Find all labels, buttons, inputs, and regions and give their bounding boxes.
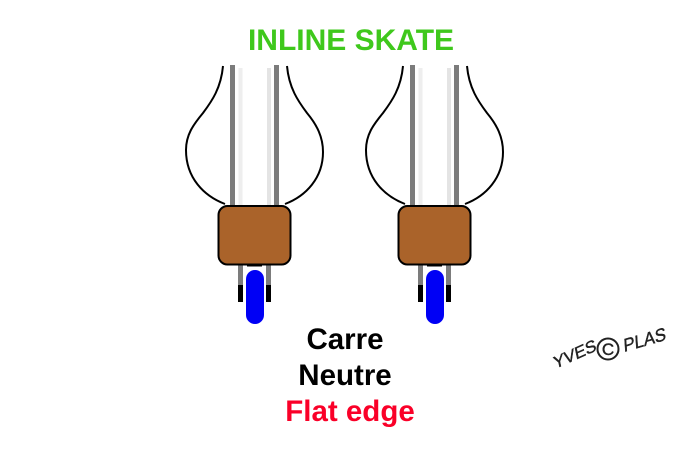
icon: left skate bbox=[186, 65, 323, 324]
label: Flat edge: Flat edge bbox=[285, 395, 415, 428]
label: Neutre: Neutre bbox=[298, 359, 392, 392]
signature: PLAS: PLAS bbox=[623, 324, 667, 356]
icon: right skate bbox=[366, 65, 503, 324]
signature: YVES: YVES bbox=[552, 335, 598, 373]
right skate brown block bbox=[398, 206, 470, 264]
left skate blue wheel bbox=[246, 270, 264, 324]
right skate boot bars bbox=[410, 65, 459, 206]
right skate blue wheel bbox=[426, 270, 444, 324]
left skate boot bars bbox=[230, 65, 279, 206]
right skate leg outline bbox=[366, 66, 503, 204]
left skate brown block bbox=[218, 206, 290, 264]
label: Carre: Carre bbox=[306, 323, 384, 356]
left skate frame bbox=[238, 264, 271, 302]
left skate leg outline bbox=[186, 66, 323, 204]
icon: copyright: C bbox=[602, 340, 614, 359]
right skate frame bbox=[418, 264, 451, 302]
signature bbox=[552, 324, 667, 373]
title: INLINE SKATE bbox=[248, 24, 454, 57]
